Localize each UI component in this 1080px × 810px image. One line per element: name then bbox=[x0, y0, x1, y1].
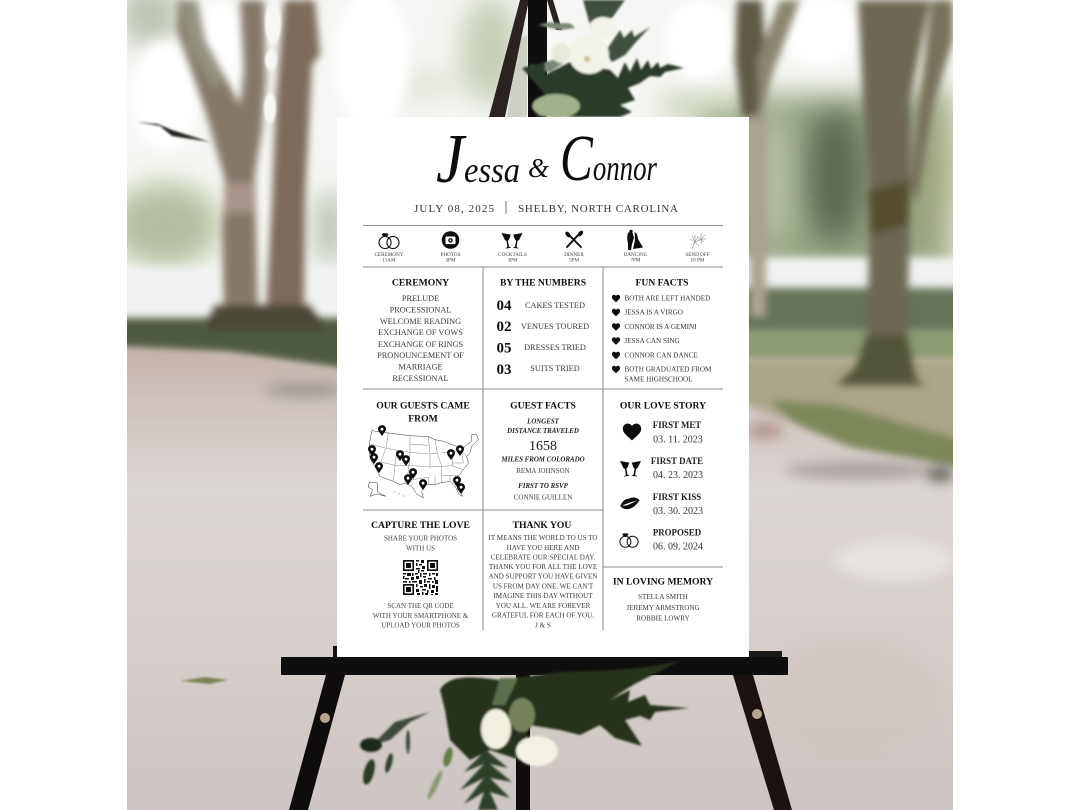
panel: guest facts: FIRST TO RSVP bbox=[518, 483, 569, 490]
panel: our love story: FIRST MET bbox=[653, 420, 701, 430]
panel: guest facts: CONNIE GUILLEN bbox=[514, 494, 572, 502]
panel: guest facts: REMA JOHNSON bbox=[516, 467, 570, 475]
panel: capture the love: WITH YOUR SMARTPHONE & bbox=[373, 612, 469, 620]
panel: our guests came from bbox=[368, 400, 478, 498]
panel: our love story: FIRST KISS bbox=[653, 492, 701, 502]
panel: in loving memory: JEREMY ARMSTRONG bbox=[626, 604, 700, 612]
panel: fun facts: FUN FACTS bbox=[635, 278, 689, 288]
date and location: SHELBY, NORTH CAROLINA bbox=[518, 203, 678, 215]
icon: dancing couple bbox=[627, 230, 643, 250]
panel: fun facts: CONNOR IS A GEMINI bbox=[624, 323, 697, 331]
icon: rings bbox=[620, 533, 638, 547]
timeline labels: DINNER bbox=[564, 252, 584, 258]
timeline labels: 5PM bbox=[569, 258, 579, 264]
panel: in loving memory: IN LOVING MEMORY bbox=[613, 576, 713, 588]
panel: thank you: IMAGINE THIS DAY WITHOUT bbox=[493, 592, 593, 600]
timeline labels: PHOTOS bbox=[440, 252, 461, 258]
panel: our love story: FIRST DATE bbox=[651, 456, 703, 466]
panel: thank you: THANK YOU FOR ALL THE LOVE bbox=[489, 563, 597, 571]
panel: by the numbers: CAKES TESTED bbox=[525, 301, 585, 310]
panel: in loving memory bbox=[613, 576, 713, 622]
right trees bbox=[735, 0, 953, 385]
sign board bbox=[337, 117, 749, 657]
icon: lips bbox=[619, 496, 641, 511]
panel: our love story: PROPOSED bbox=[653, 528, 701, 538]
panel: by the numbers: 03 bbox=[496, 362, 512, 378]
map pins bbox=[368, 425, 465, 494]
ground debris bbox=[180, 677, 228, 684]
panel: in loving memory: ROBBIE LOWRY bbox=[636, 614, 690, 622]
panel: ceremony: EXCHANGE OF RINGS bbox=[378, 340, 464, 349]
panel: capture the love: WITH US bbox=[406, 544, 435, 552]
panel: guest facts: MILES FROM COLORADO bbox=[500, 456, 585, 464]
icon: ceremony rings bbox=[379, 233, 399, 249]
panel: our love story: 03. 11. 2023 bbox=[653, 434, 703, 446]
grass verge bbox=[110, 288, 970, 375]
panel: our love story: 03. 30. 2023 bbox=[653, 506, 703, 517]
panel: guest facts: DISTANCE TRAVELED bbox=[506, 428, 579, 435]
panel: our guests came from: OUR GUESTS CAME bbox=[376, 400, 470, 412]
panel: our love story: 06. 09. 2024 bbox=[653, 542, 703, 552]
timeline labels: 3PM bbox=[507, 258, 518, 264]
panel: ceremony: PROCESSIONAL bbox=[390, 306, 451, 314]
panel: by the numbers: 04 bbox=[496, 298, 512, 314]
panel: by the numbers: SUITS TRIED bbox=[530, 364, 580, 373]
panel: fun facts: BOTH ARE LEFT HANDED bbox=[624, 294, 710, 302]
panel: thank you: US FROM DAY ONE. WE CAN'T bbox=[493, 582, 594, 590]
top floral arrangement bbox=[522, 0, 684, 118]
timeline labels: COCKTAILS bbox=[498, 252, 527, 258]
icon: heart bbox=[623, 423, 641, 441]
title: couple names: Jessa bbox=[436, 121, 520, 198]
icon: dinner fork and spoon bbox=[564, 230, 584, 247]
panel: ceremony: RECESSIONAL bbox=[392, 374, 449, 383]
panel: fun facts: BOTH GRADUATED FROM bbox=[624, 366, 712, 374]
panel: capture the love: CAPTURE THE LOVE bbox=[371, 520, 470, 531]
panel: in loving memory: STELLA SMITH bbox=[638, 593, 688, 601]
panel: by the numbers: 02 bbox=[496, 319, 512, 335]
title: couple names bbox=[436, 121, 658, 198]
panel: fun facts: CONNOR CAN DANCE bbox=[624, 352, 698, 360]
panel: by the numbers: 05 bbox=[496, 340, 512, 356]
panel: guest facts: 1658 bbox=[529, 439, 557, 454]
date and location bbox=[414, 201, 678, 215]
timeline labels bbox=[374, 252, 710, 264]
panel: thank you: GRATEFUL FOR EACH OF YOU. bbox=[492, 612, 594, 620]
panel: thank you: J & S bbox=[535, 622, 551, 630]
panel: fun facts bbox=[612, 278, 712, 384]
panel: our love story: 04. 23. 2023 bbox=[653, 470, 703, 481]
timeline labels: 7PM bbox=[630, 258, 641, 264]
easel lower frame bbox=[281, 646, 792, 810]
panel: ceremony: MARRIAGE bbox=[398, 362, 443, 372]
panel: by the numbers: DRESSES TRIED bbox=[524, 343, 586, 352]
water bands bbox=[128, 252, 953, 284]
panel: thank you: CELEBRATE OUR SPECIAL DAY. bbox=[491, 554, 596, 562]
timeline labels: 3PM bbox=[445, 258, 456, 264]
icon: cocktail glasses bbox=[620, 461, 641, 477]
panel: capture the love: SHARE YOUR PHOTOS bbox=[384, 534, 457, 542]
sign content bbox=[363, 121, 723, 630]
panel: by the numbers: VENUES TOURED bbox=[521, 322, 589, 331]
bare branch bbox=[137, 122, 210, 142]
panel: capture the love: SCAN THE QR CODE bbox=[387, 602, 454, 610]
panel: ceremony: EXCHANGE OF VOWS bbox=[378, 328, 463, 337]
icon: sparklers bbox=[690, 233, 706, 249]
timeline labels: SEND OFF bbox=[685, 252, 710, 258]
panel: ceremony: CEREMONY bbox=[392, 278, 449, 288]
left trees bbox=[177, 0, 325, 330]
grid lines bbox=[363, 226, 723, 630]
panel: capture the love bbox=[371, 520, 470, 630]
QR code bbox=[403, 560, 438, 595]
panel: fun facts: JESSA CAN SING bbox=[624, 337, 680, 345]
panel: thank you: YOU ALL. WE ARE FOREVER bbox=[496, 602, 591, 610]
panel: guest facts: LONGEST bbox=[526, 418, 560, 426]
icon: camera bbox=[442, 231, 459, 249]
lawn on the right bbox=[749, 356, 953, 472]
bokeh gaps in trunks bbox=[264, 2, 281, 123]
date and location: JULY 08, 2025 bbox=[414, 203, 494, 215]
timeline labels: 11AM bbox=[382, 258, 396, 264]
easel upper legs bbox=[489, 0, 562, 117]
panel: ceremony: WELCOME READING bbox=[380, 317, 461, 326]
timeline labels: CEREMONY bbox=[374, 252, 404, 258]
panel: thank you bbox=[488, 520, 598, 630]
panel: ceremony: PRELUDE bbox=[402, 294, 439, 303]
panel: thank you: HAVE YOU HERE AND bbox=[507, 544, 579, 552]
gravel path bbox=[100, 345, 980, 810]
panel: by the numbers bbox=[496, 278, 589, 378]
panel: thank you: IT MEANS THE WORLD TO US TO bbox=[488, 534, 598, 542]
panel: our love story bbox=[619, 400, 706, 552]
timeline labels: DANCING bbox=[624, 252, 648, 258]
panel: fun facts: JESSA IS A VIRGO bbox=[624, 308, 683, 316]
panel: thank you: THANK YOU bbox=[513, 520, 571, 531]
panel: guest facts bbox=[500, 400, 585, 502]
panel: ceremony: PRONOUNCEMENT OF bbox=[377, 351, 464, 360]
panel: guest facts: GUEST FACTS bbox=[510, 400, 576, 412]
panel: thank you: AND SUPPORT YOU HAVE GIVEN bbox=[488, 572, 598, 580]
title: couple names: Connor bbox=[560, 122, 658, 195]
panel: ceremony bbox=[377, 278, 464, 383]
panel: capture the love: UPLOAD YOUR PHOTOS bbox=[381, 622, 460, 630]
title: couple names: & bbox=[528, 153, 549, 183]
US map with pins bbox=[368, 425, 478, 498]
icon: cocktails bbox=[502, 233, 522, 249]
panel: our guests came from: FROM bbox=[408, 414, 438, 424]
sky and foliage bbox=[127, 0, 953, 298]
panel: our love story: OUR LOVE STORY bbox=[620, 400, 706, 412]
bottom floral arrangement bbox=[360, 660, 689, 810]
timeline icons row bbox=[374, 230, 710, 264]
timeline labels: 10 PM bbox=[691, 258, 705, 264]
panel: fun facts: SAME HIGHSCHOOL bbox=[624, 376, 693, 384]
panel: by the numbers: BY THE NUMBERS bbox=[500, 278, 586, 288]
path shadow blotches bbox=[264, 378, 953, 581]
